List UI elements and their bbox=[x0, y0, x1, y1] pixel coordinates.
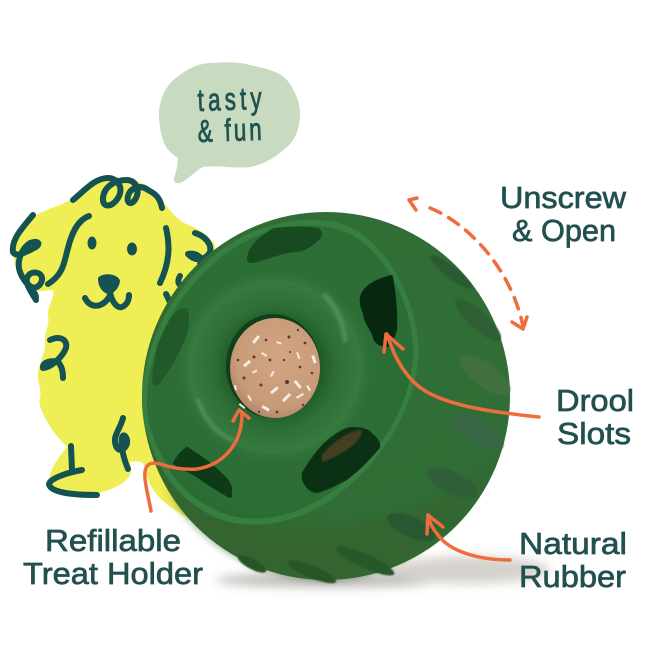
donut highlight ring bbox=[175, 267, 375, 467]
label: unscrew and open: Unscrew bbox=[500, 180, 627, 215]
arrow: unscrew dashed bbox=[409, 198, 527, 329]
right side grip slots bbox=[236, 251, 516, 587]
front face recess bbox=[147, 225, 413, 519]
face slots bbox=[154, 228, 395, 496]
speech bubble text bbox=[197, 80, 263, 149]
glossy highlights bbox=[198, 295, 345, 440]
label: refillable treat holder: Refillable bbox=[45, 523, 181, 558]
speech bubble text: tasty bbox=[197, 80, 263, 118]
dog body bbox=[14, 178, 215, 520]
label: unscrew and open: & Open bbox=[512, 213, 616, 248]
speech bubble bbox=[159, 62, 300, 183]
treat flecks bbox=[234, 335, 317, 412]
label: natural rubber bbox=[519, 526, 627, 594]
label: refillable treat holder bbox=[23, 523, 203, 591]
speech bubble text: & fun bbox=[197, 111, 262, 149]
label: drool slots: Slots bbox=[557, 416, 631, 451]
label: natural rubber: Natural bbox=[519, 526, 627, 561]
treat specks bbox=[237, 329, 313, 413]
label: drool slots: Drool bbox=[556, 383, 634, 418]
arrow: refillable treat holder bbox=[145, 410, 249, 511]
label: unscrew and open bbox=[500, 180, 627, 248]
ball outer shell bbox=[142, 212, 510, 580]
label: refillable treat holder: Treat Holder bbox=[23, 556, 203, 591]
arrow: natural rubber bbox=[427, 515, 510, 560]
front face rim bbox=[142, 220, 418, 525]
treat hole bbox=[226, 314, 320, 418]
lower shell shading bbox=[165, 465, 490, 580]
ground shadow bbox=[215, 556, 550, 587]
dog line art bbox=[13, 178, 210, 495]
illustrated dog bbox=[13, 178, 215, 520]
treat ball bbox=[230, 318, 320, 418]
rubber ball toy bbox=[142, 212, 516, 587]
label: natural rubber: Rubber bbox=[519, 559, 626, 594]
label: drool slots bbox=[556, 383, 634, 451]
arrow: drool slots bbox=[384, 334, 539, 417]
